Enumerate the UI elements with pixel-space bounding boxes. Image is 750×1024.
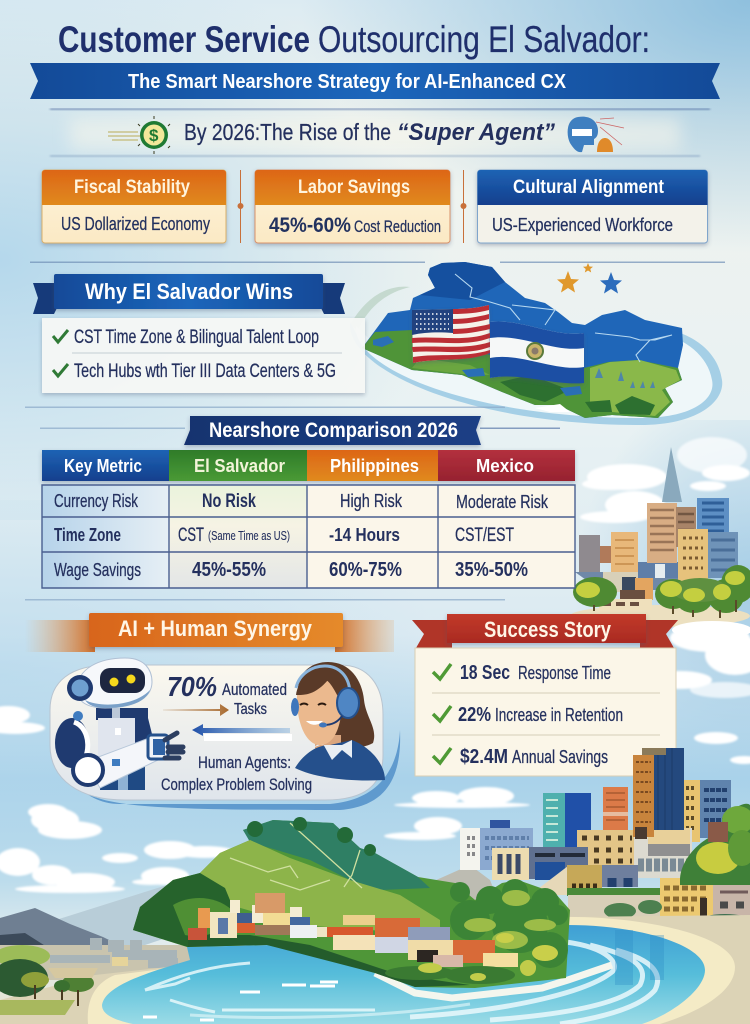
subtitle ribbon: The Smart Nearshore Strategy for AI-Enhanced CX: [128, 71, 567, 93]
banner: success story: Success Story: [484, 617, 612, 642]
card dividers: [238, 170, 466, 243]
check list item two: Tech Hubs wth Tier III Data Centers & 5G: [74, 361, 336, 382]
panel: why El Salvador wins list: [42, 318, 365, 393]
landscape: city lower right: [460, 780, 750, 920]
table header row: Philippines: [330, 456, 419, 476]
panel: AI and human synergy: [50, 658, 400, 810]
card: labor savings: Labor Savings: [298, 177, 410, 198]
comparison table: [42, 450, 575, 588]
result: response time: [433, 662, 611, 684]
card: cultural alignment: Cultural Alignment: [513, 177, 665, 198]
table body: Currency Risk: [54, 491, 139, 511]
card: labor savings: [255, 170, 450, 243]
table header row: Key Metric: [64, 456, 142, 476]
table body: CST/EST: [455, 525, 514, 546]
icon: dollar coin: [108, 116, 170, 154]
card: labor savings: 45%-60%: [269, 214, 351, 237]
title: Customer Service: [58, 19, 310, 60]
table body: 45%-55%: [192, 559, 266, 581]
card: cultural alignment: US-Experienced Workforce: [492, 215, 673, 235]
landscape: coastal town: [188, 893, 536, 987]
banner: success story: [412, 614, 678, 648]
table body: 60%-75%: [329, 559, 402, 581]
card: fiscal stability: [42, 170, 226, 243]
banner: AI + Human Synergy: [25, 613, 394, 652]
result: annual savings: Annual Savings: [512, 747, 608, 767]
panel: success story: [415, 648, 676, 776]
landscape: sand and shore: [0, 915, 750, 1024]
banner: nearshore comparison: Nearshore Comparison 2026: [209, 419, 458, 442]
arrow: human to robot: [192, 724, 292, 741]
heading: rise of the super agent: By 2026:The Rise of the: [184, 119, 391, 145]
result: retention: [433, 704, 623, 726]
result: response time: 18 Sec: [460, 662, 510, 684]
icon: human agent: [291, 662, 385, 780]
label: 70% automated tasks: [167, 671, 287, 718]
heading: rise of the super agent: “Super Agent”: [397, 119, 555, 146]
table body: Wage Savings: [54, 560, 141, 580]
landscape: far mountains: [0, 865, 500, 980]
check list item one: [53, 327, 319, 348]
table body: [42, 485, 575, 588]
icon: El Salvador flag: [490, 321, 584, 383]
city skyline upper right: [570, 447, 750, 639]
result: annual savings: [433, 746, 608, 768]
table body: No Risk: [202, 491, 256, 512]
arrow: tasks to human: [163, 704, 229, 716]
label: human agents: Human Agents:: [198, 753, 291, 772]
heading: rise of the super agent: [184, 119, 555, 146]
clouds: [0, 437, 750, 893]
card: labor savings: Cost Reduction: [354, 217, 441, 236]
result: retention: Increase in Retention: [495, 705, 623, 725]
table body: High Risk: [340, 491, 403, 511]
result: retention: 22%: [458, 704, 491, 726]
table body: Time Zone: [54, 525, 121, 545]
subtitle ribbon: [30, 63, 720, 99]
banner: AI + Human Synergy: AI + Human Synergy: [118, 616, 313, 641]
result: annual savings: $2.4M: [460, 746, 508, 768]
icon: dollar coin: $: [149, 126, 159, 145]
label: human agents: [161, 753, 312, 794]
table header row: Mexico: [476, 456, 534, 476]
label: 70% automated tasks: Automated: [222, 680, 287, 699]
landscape: water: [102, 925, 705, 1024]
card: fiscal stability: Fiscal Stability: [74, 177, 190, 198]
banner: why El Salvador wins: Why El Salvador Wins: [85, 279, 293, 304]
label: 70% automated tasks: 70%: [167, 671, 217, 702]
card: fiscal stability: US Dollarized Economy: [61, 214, 210, 234]
map of El Salvador: [362, 262, 683, 418]
icon: head with bell: [568, 117, 624, 152]
landscape: foliage right: [604, 804, 750, 934]
card: cultural alignment: [478, 170, 708, 243]
landscape: towers in front of panel: [633, 748, 684, 839]
table body: -14 Hours: [329, 525, 400, 545]
swoosh behind map: [350, 287, 722, 425]
table body: 35%-50%: [455, 559, 528, 581]
table body: Moderate Risk: [456, 492, 549, 512]
landscape: green hill: [133, 817, 612, 998]
result: response time: Response Time: [518, 663, 611, 683]
title: [58, 19, 650, 60]
icon: US flag: [412, 305, 490, 363]
icon: robot: [55, 658, 183, 790]
table body: (Same Time as US): [208, 528, 290, 543]
banner: why El Salvador wins: [33, 274, 345, 314]
label: 70% automated tasks: Tasks: [234, 701, 267, 718]
table body: CST: [178, 525, 204, 546]
label: human agents: Complex Problem Solving: [161, 775, 312, 794]
stars: [557, 263, 622, 294]
landscape: left shore trees: [0, 945, 98, 1015]
table header row: El Salvador: [194, 456, 285, 476]
title: Outsourcing El Salvador:: [318, 19, 650, 60]
table header row: [42, 450, 575, 481]
check list item one: CST Time Zone & Bilingual Talent Loop: [74, 327, 319, 348]
